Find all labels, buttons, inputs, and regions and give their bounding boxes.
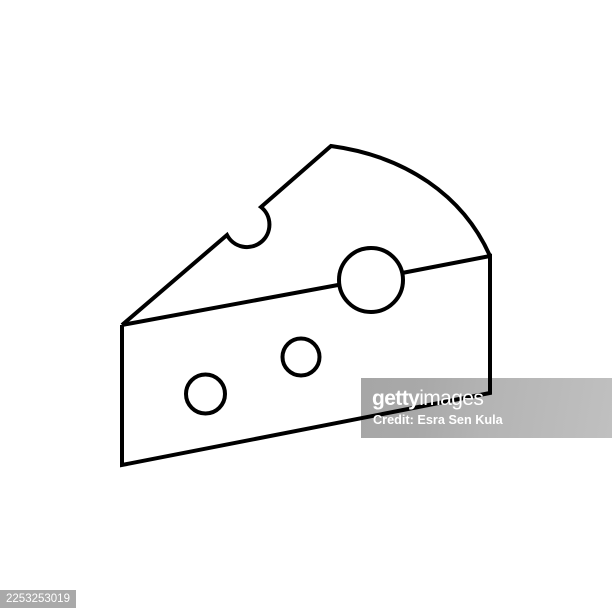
- image id label: 2253253019: [6, 593, 70, 605]
- watermark credit text: Credit: Esra Sen Kula: [373, 413, 503, 427]
- image id label: [0, 590, 76, 608]
- watermark text: [372, 387, 503, 427]
- cheese front outline: [122, 256, 490, 465]
- large hole: [339, 248, 403, 312]
- cheese top outline with bite notch: [122, 146, 490, 325]
- watermark banner background: [361, 378, 612, 438]
- middle hole: [282, 338, 320, 376]
- lower hole: [186, 374, 225, 414]
- watermark logo text: gettyimages: [372, 387, 483, 410]
